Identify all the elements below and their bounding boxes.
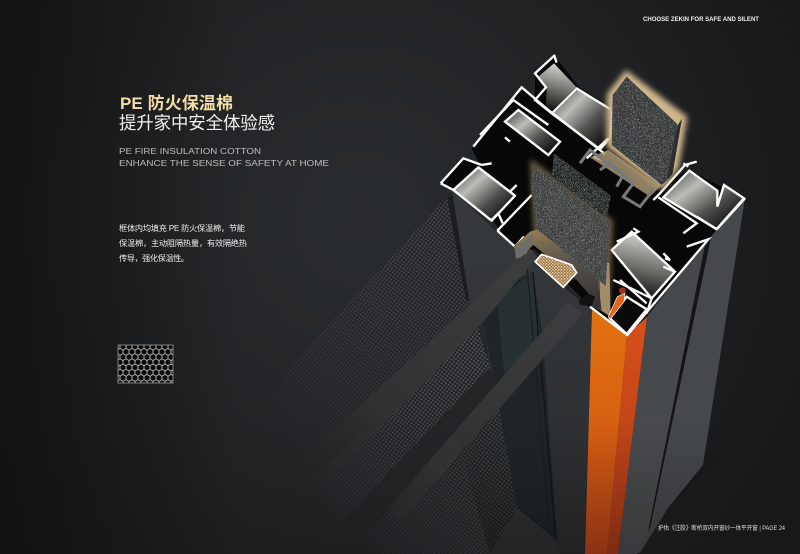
foam block: back [612,77,682,185]
header tagline: CHOOSE ZEKIN FOR SAFE AND SILENT [643,16,760,23]
orange face: left [585,310,627,554]
diagonal bar: lower [388,303,583,522]
right profile face [618,238,708,554]
mesh panel: upper edge weave [447,195,473,303]
box: top narrow [538,63,577,112]
mesh panel: lower [374,410,517,554]
body line 2: 保温棉，主动阻隔热量，有效隔绝热 [119,238,247,248]
heading [119,93,275,133]
profile outlines [441,55,745,335]
title: white: 提升家中安全体验感 [119,113,275,133]
body line 3: 传导，强化保温性。 [119,253,189,263]
box: left lower [453,167,515,221]
thermal break strip [580,150,660,207]
window frame body [295,190,760,554]
perforated security mesh [262,195,520,554]
honeycomb swatch [118,345,173,383]
foam glow front [533,165,610,297]
subtitle line 2: ENHANCE THE SENSE OF SAFETY AT HOME [119,159,329,168]
dark insulation: centre panel [552,153,611,218]
body line 1: 框体内均填充 PE 防火保温棉，节能 [119,223,245,233]
glass strip [483,272,557,540]
cross section [441,55,745,335]
upper teal tint [497,272,541,380]
orange face: right [607,317,647,554]
bottom vignette [452,420,760,554]
subtitle line 1: PE FIRE INSULATION COTTON [119,147,261,156]
foam block: front [531,165,610,286]
frame groove lines [517,268,556,540]
right shadow stripe [648,235,711,532]
box: right [663,171,744,229]
right outer face [636,198,745,553]
diagonal bar: upper [295,247,537,490]
section base [441,55,745,335]
mesh panel: middle [316,328,490,512]
lower sill [490,507,560,554]
beige reflective gap [600,257,611,317]
box: centre lower [612,232,675,298]
mesh panel: upper [278,200,470,436]
glass bead and glazing [513,229,602,312]
title: gold: PE 防火保温棉 [120,93,233,113]
footer page label: 护佑《注胶》断桥双内开窗纱一体平开窗 | PAGE 24 [658,524,785,532]
orange gasket [608,293,625,319]
box: upper small [505,110,560,155]
red seal [619,287,626,294]
foam glow back [610,75,683,185]
body text [119,223,247,263]
english subtitle [119,147,329,168]
box: top long [552,88,612,149]
box: bottom [610,297,647,334]
left profile face [452,190,592,554]
insulated spacer [535,254,577,287]
